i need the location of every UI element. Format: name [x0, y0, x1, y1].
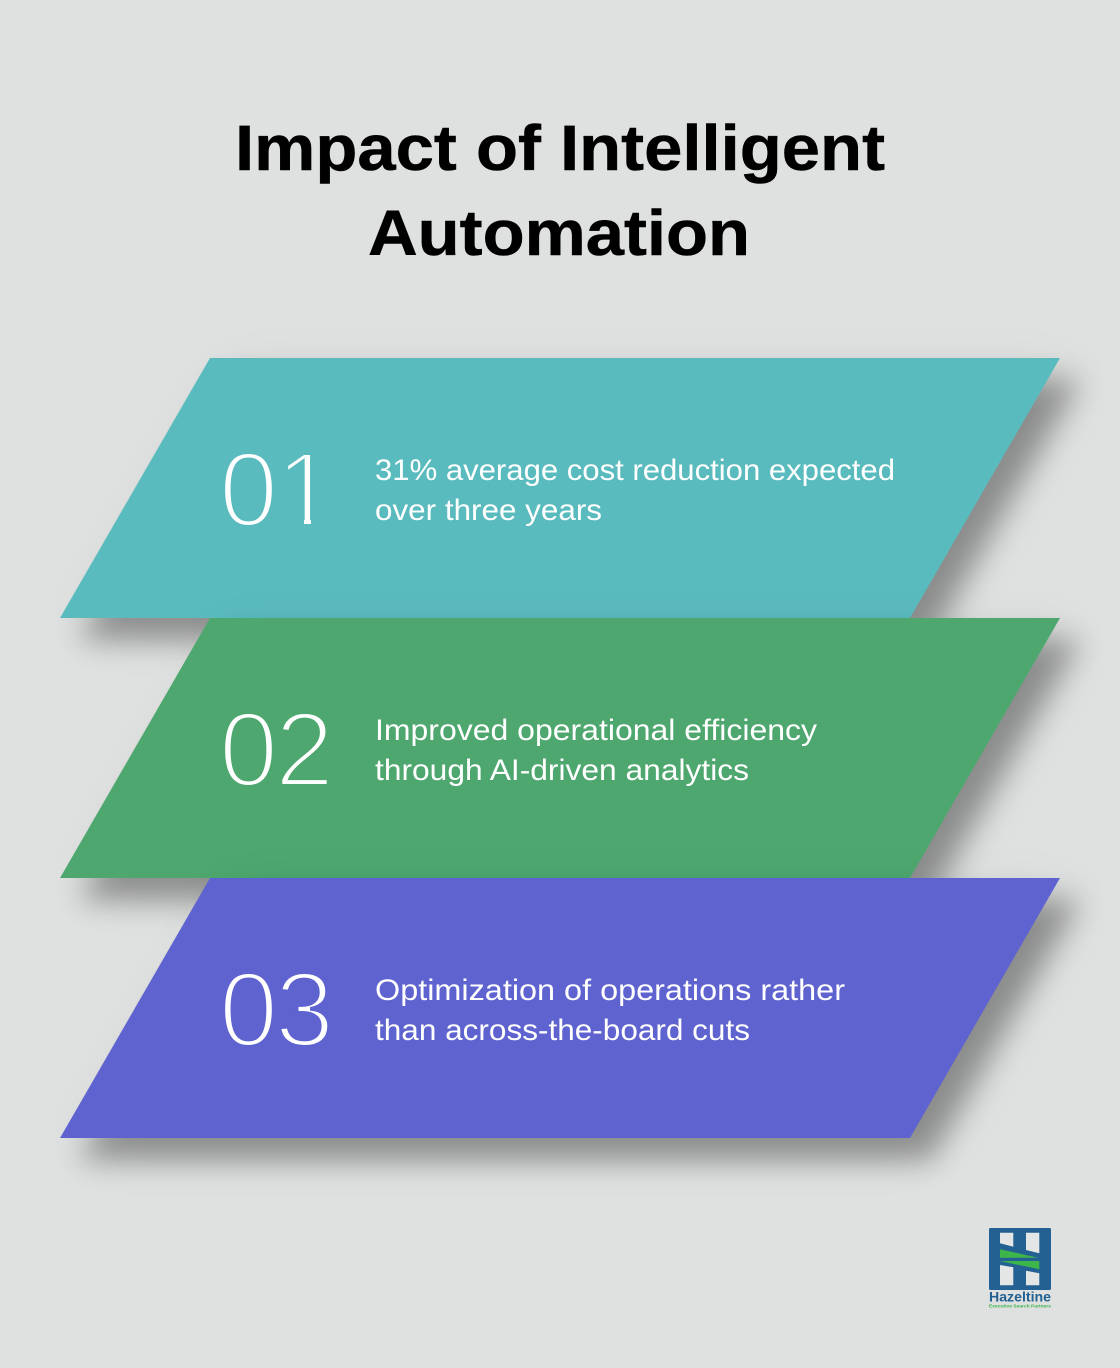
panel shape 03 [60, 878, 1060, 1138]
panel: step 02 [60, 618, 1080, 900]
text: step 01 [375, 454, 895, 527]
number 01: 0 [219, 431, 278, 549]
panel: step 03 [60, 878, 1080, 1160]
number 03: 03 [219, 951, 334, 1069]
number 01: 1 [276, 431, 335, 549]
text: step 03 [375, 974, 845, 1047]
text: step 02: through AI-driven analytics [375, 754, 749, 787]
title [235, 112, 885, 269]
text: step 01: 31% average cost reduction expected [375, 454, 895, 487]
number 01 [225, 454, 311, 525]
logo: Hazeltine [989, 1228, 1051, 1308]
panel shape 01 [60, 358, 1060, 618]
logo: Hazeltine: Executive Search Partners [989, 1304, 1051, 1308]
panel shape 02 [60, 618, 1060, 878]
text: step 03: than across-the-board cuts [375, 1014, 750, 1047]
number 02: 02 [219, 691, 334, 809]
panel: step 01 [60, 358, 1080, 640]
text: step 02 [375, 714, 817, 787]
title: Automation [368, 197, 750, 269]
text: step 01: over three years [375, 494, 602, 527]
title: Impact of Intelligent [235, 112, 885, 184]
text: step 02: Improved operational efficiency [375, 714, 817, 747]
text: step 03: Optimization of operations rather [375, 974, 845, 1007]
logo: Hazeltine: Hazeltine [989, 1290, 1051, 1304]
